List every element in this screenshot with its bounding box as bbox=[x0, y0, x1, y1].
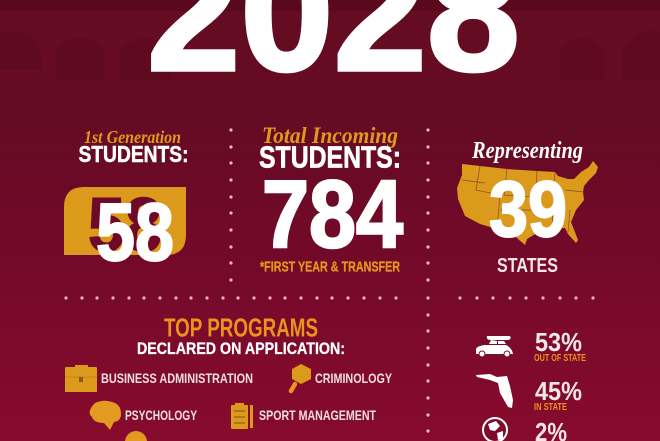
script heading: representing: Representing bbox=[471, 138, 583, 164]
heading: students: STUDENTS: bbox=[259, 140, 401, 174]
panel: total incoming students bbox=[259, 123, 403, 276]
US map bbox=[457, 161, 598, 245]
label: criminology: CRIMINOLOGY bbox=[315, 370, 392, 386]
heading: top programs: TOP PROGRAMS bbox=[164, 312, 318, 342]
panel: student origin bbox=[476, 327, 586, 441]
icon: briefcase bbox=[65, 365, 97, 392]
panel: first generation students bbox=[64, 127, 188, 278]
gold badge bbox=[64, 187, 186, 255]
number: 39: 39 bbox=[489, 164, 567, 253]
footnote: *FIRST YEAR & TRANSFER bbox=[260, 258, 400, 276]
subheading: DECLARED ON APPLICATION: bbox=[137, 339, 345, 358]
label: out of state: OUT OF STATE bbox=[534, 353, 586, 364]
label: in state: IN STATE bbox=[534, 402, 567, 413]
number: 784: 784 bbox=[262, 161, 403, 268]
background: faded arches bbox=[0, 0, 660, 80]
dotted dividers bbox=[64, 128, 595, 433]
icon: brain bbox=[90, 401, 121, 430]
heading: students: STUDENTS: bbox=[78, 141, 188, 167]
icon: magnifier bbox=[291, 364, 311, 391]
label: psychology: PSYCHOLOGY bbox=[125, 407, 197, 423]
icon: partially visible circle bbox=[125, 431, 147, 441]
label: sport management: SPORT MANAGEMENT bbox=[259, 407, 376, 423]
icon: clipboard bbox=[231, 403, 253, 429]
script heading: total incoming: Total Incoming bbox=[262, 123, 398, 148]
number: 58: 58 bbox=[96, 187, 174, 278]
icon: car bbox=[476, 336, 513, 357]
panel: top programs bbox=[65, 312, 392, 441]
script heading: 1st Generation: 1st Generation bbox=[84, 127, 181, 147]
stat: 45%: 45% bbox=[535, 376, 582, 406]
stat: 53%: 53% bbox=[535, 327, 582, 357]
number shadow: 58 bbox=[88, 183, 162, 268]
label: business administration: BUSINESS ADMINISTRATION bbox=[101, 370, 253, 386]
panel: states represented bbox=[457, 138, 598, 277]
icon: globe bbox=[483, 418, 507, 441]
icon: florida bbox=[476, 374, 513, 408]
label: states: STATES bbox=[497, 255, 558, 277]
